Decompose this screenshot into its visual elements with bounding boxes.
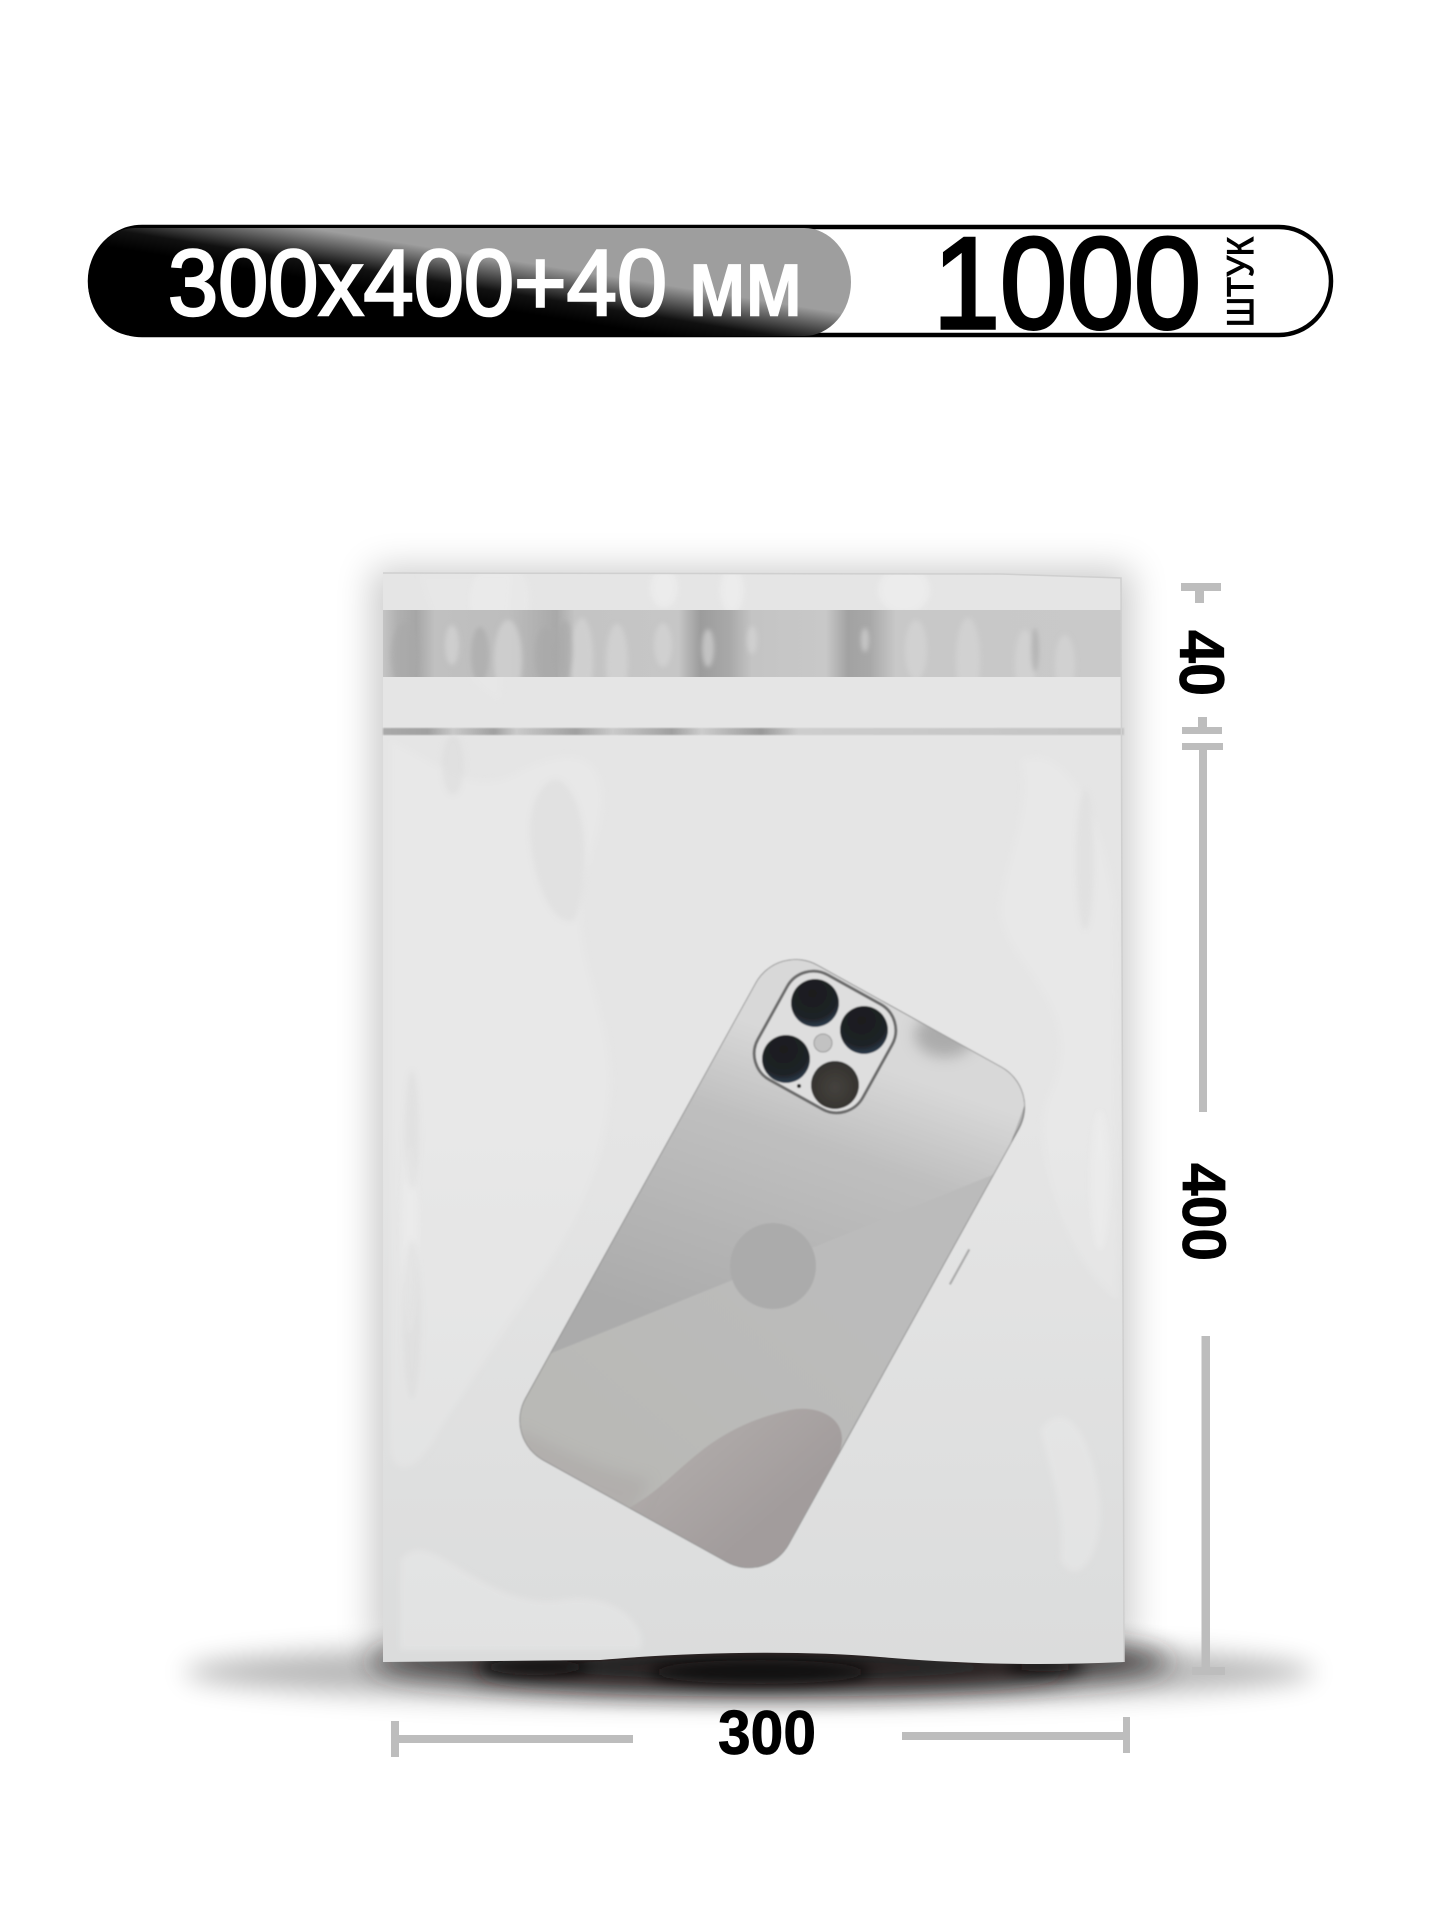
phone inside bag bbox=[518, 958, 1026, 1569]
banner outline bbox=[90, 227, 1331, 335]
dimension: width 300 bbox=[391, 1699, 1130, 1768]
dimension: width 300: 300 bbox=[718, 1699, 816, 1768]
dimension: flap 40 bbox=[1166, 583, 1236, 734]
phone body bbox=[504, 944, 1040, 1583]
dimension: height 400 bbox=[1170, 743, 1238, 1675]
dimension: height 400: 400 bbox=[1170, 1163, 1238, 1261]
bag body bbox=[383, 573, 1124, 1664]
adhesive strip bbox=[383, 610, 1120, 677]
phone bottom wave bbox=[632, 1408, 842, 1568]
banner: size and quantity bbox=[88, 210, 1331, 356]
size text: 300x400+40 bbox=[168, 230, 667, 335]
quantity number: 1000 bbox=[933, 210, 1201, 356]
bag edges bbox=[383, 573, 1124, 1662]
phone upper tone bbox=[552, 959, 1025, 1352]
phone dark corner spot bbox=[915, 1013, 975, 1057]
camera module bbox=[743, 960, 907, 1124]
quantity unit: ШТУК bbox=[1220, 237, 1261, 327]
phone lower tone bbox=[520, 1175, 993, 1508]
phone logo circle bbox=[730, 1223, 816, 1309]
phone side buttons bbox=[563, 1083, 970, 1349]
bag wrinkles bbox=[410, 1236, 411, 1237]
bag shadow bbox=[184, 568, 1314, 1702]
seal line bbox=[383, 728, 1124, 735]
plastic bag bbox=[383, 560, 1124, 1664]
banner dark pill bbox=[88, 228, 851, 336]
dimension: flap 40: 40 bbox=[1166, 630, 1236, 696]
size text: мм bbox=[689, 230, 802, 335]
